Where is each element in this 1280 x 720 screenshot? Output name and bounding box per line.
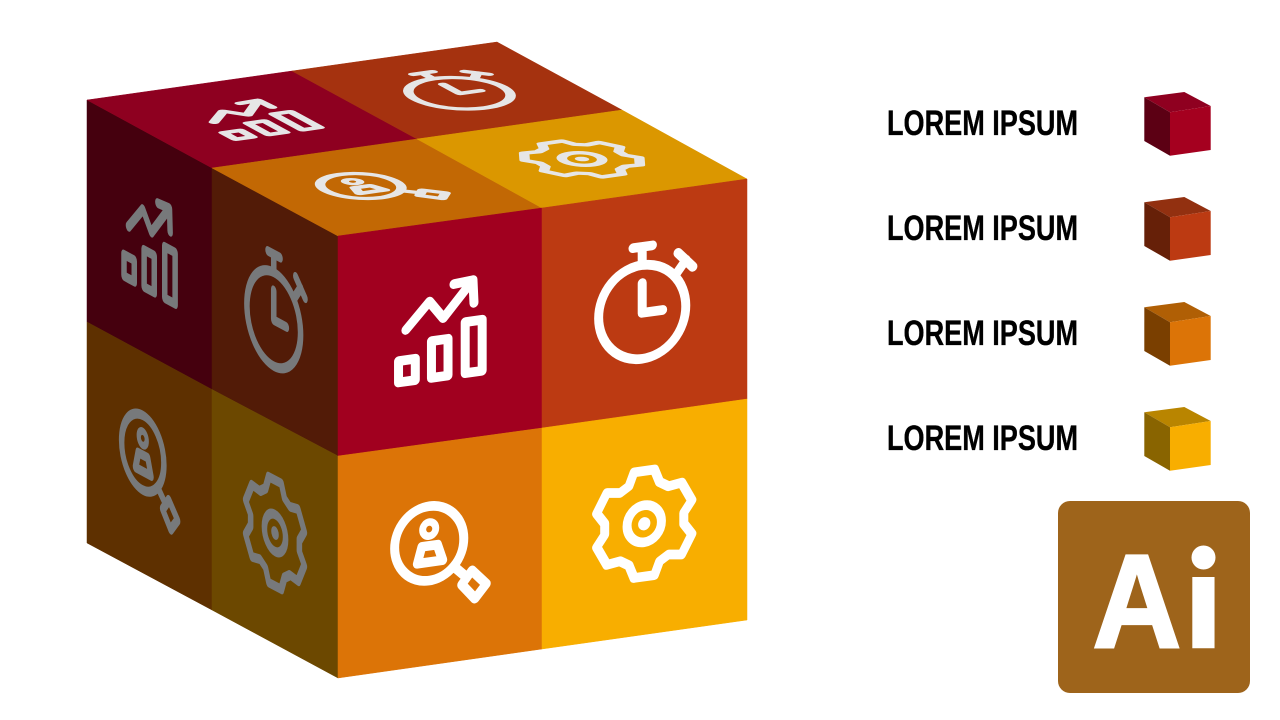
icon: magnifier on left face xyxy=(122,404,178,533)
icon: gear on front face xyxy=(597,464,692,583)
legend row 3 xyxy=(887,302,1211,366)
icon: chart on front face xyxy=(399,279,482,382)
panel: cube front face xyxy=(338,179,747,678)
panel: cube top face xyxy=(87,42,747,236)
icon: red mini cube xyxy=(1144,92,1211,156)
icon: stopwatch on left face xyxy=(247,240,305,383)
icon: gear on top face xyxy=(504,136,660,182)
legend row 4 xyxy=(887,407,1211,471)
icon: Ai logo xyxy=(1058,501,1250,693)
legend label 3: LOREM IPSUM xyxy=(887,314,1078,353)
icon: magnifier on front face xyxy=(395,498,486,610)
legend label 2: LOREM IPSUM xyxy=(887,209,1078,248)
icon: gear on left face xyxy=(246,465,304,601)
icon: red-orange mini cube xyxy=(1144,197,1211,261)
legend row 2 xyxy=(887,197,1211,261)
icon: yellow mini cube xyxy=(1144,407,1211,471)
icon: orange mini cube xyxy=(1144,302,1211,366)
legend row 1 xyxy=(887,92,1211,156)
icon: chart on top face xyxy=(183,99,320,139)
icon: stopwatch on top face xyxy=(379,66,537,114)
panel: large cube xyxy=(87,42,747,678)
panel: cube left face xyxy=(87,100,338,678)
icon: stopwatch on front face xyxy=(599,240,693,365)
icon: Ai logo: A xyxy=(1092,528,1181,676)
legend label 1: LOREM IPSUM xyxy=(887,104,1078,143)
icon: chart on left face xyxy=(124,183,175,304)
icon: magnifier on top face xyxy=(305,166,453,210)
icon: Ai logo: i xyxy=(1181,526,1226,677)
legend label 4: LOREM IPSUM xyxy=(887,419,1078,458)
